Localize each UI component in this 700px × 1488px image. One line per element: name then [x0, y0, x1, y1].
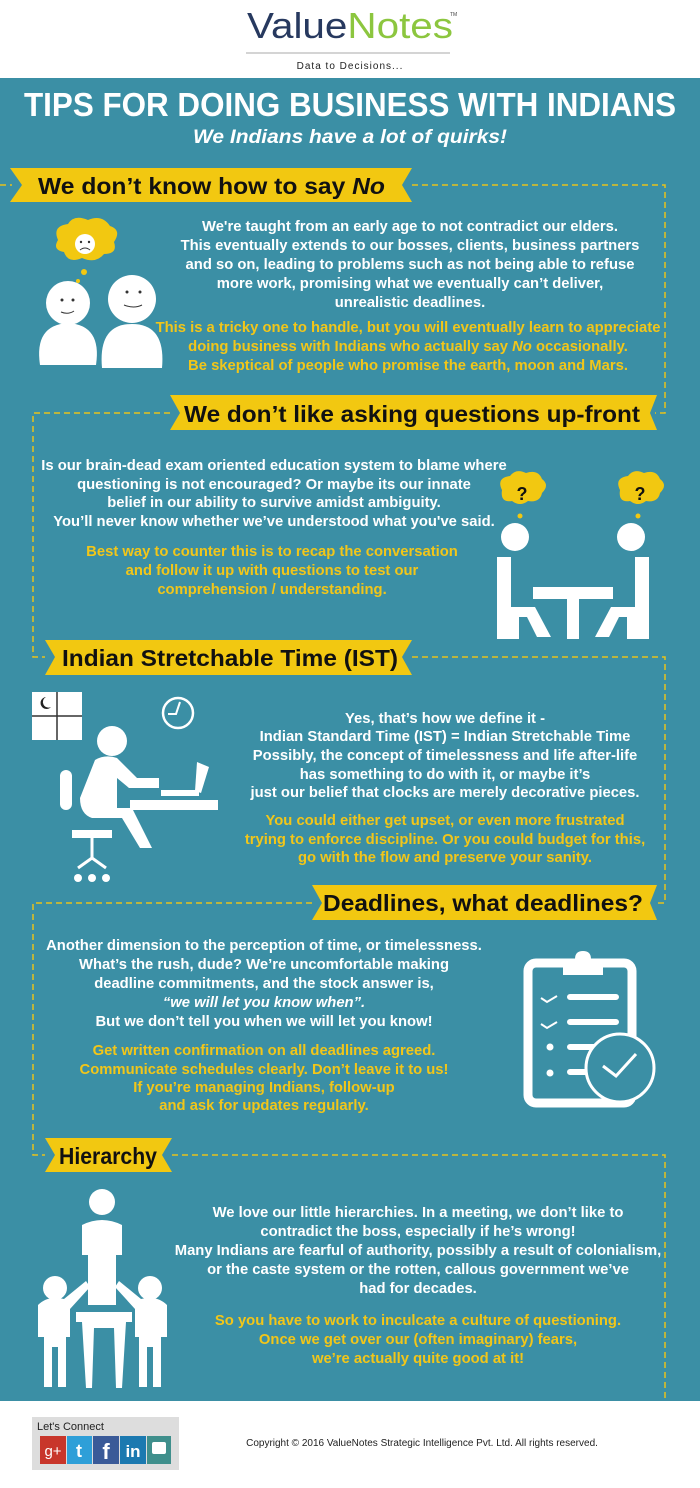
banner 1: We don’t know how to say No: [38, 173, 385, 199]
section 4 text: But we don’t tell you when we will let you know!: [95, 1014, 433, 1030]
banner 5: [45, 1138, 172, 1172]
banner 3: [45, 640, 412, 675]
section 3 text: has something to do with it, or maybe it’s: [300, 767, 590, 783]
section 5 text: had for decades.: [359, 1281, 477, 1297]
section 4 text: and ask for updates regularly.: [159, 1098, 369, 1114]
header logo: Data to Decisions...: [297, 61, 403, 72]
section 2 text: Best way to counter this is to recap the conversation: [86, 544, 458, 560]
section 2 text: belief in our ability to survive amidst ambiguity.: [107, 495, 441, 511]
copyright: Copyright © 2016 ValueNotes Strategic Intelligence Pvt. Ltd. All rights reserved.: [246, 1438, 598, 1449]
section 5 text: or the caste system or the rotten, callous government we’ve: [207, 1262, 629, 1278]
banner 4: Deadlines, what deadlines?: [323, 890, 643, 916]
section 2 text: [41, 458, 507, 598]
section 3 text: [245, 711, 645, 866]
section 5 text: We love our little hierarchies. In a meeting, we don’t like to: [213, 1205, 623, 1221]
banner 3: Indian Stretchable Time (IST): [62, 645, 398, 671]
section 4 text: Get written confirmation on all deadlines agreed.: [93, 1043, 435, 1059]
footer: social connect box: Let's Connect: [37, 1421, 104, 1433]
section 3 text: You could either get upset, or even more frustrated: [265, 813, 625, 829]
section 2 text: comprehension / understanding.: [157, 582, 387, 598]
section 3 text: just our belief that clocks are merely decorative pieces.: [250, 785, 640, 801]
section 3 text: Indian Standard Time (IST) = Indian Stretchable Time: [260, 729, 630, 745]
banner 2: [170, 395, 657, 430]
footer: social connect box: t: [76, 1441, 82, 1461]
icon: person at laptop with window and clock: [32, 692, 218, 882]
header logo: TM: [450, 12, 457, 18]
section 1 text: This eventually extends to our bosses, clients, business partners: [181, 238, 639, 254]
section 1 text: more work, promising what we eventually can’t deliver,: [217, 276, 603, 292]
section 5 text: [175, 1205, 661, 1367]
section 5 text: Many Indians are fearful of authority, possibly a result of colonialism,: [175, 1243, 661, 1259]
footer: social connect box: [32, 1417, 179, 1470]
section 3 text: Possibly, the concept of timelessness and life after-life: [253, 748, 637, 764]
icon: two people at table with question bubbles: ?: [634, 484, 646, 504]
section 1 text: This is a tricky one to handle, but you will eventually learn to appreciate: [156, 320, 660, 336]
section 4 text: “we will let you know when”.: [163, 995, 365, 1011]
section 2 text: questioning is not encouraged? Or maybe its our innate: [77, 477, 471, 493]
section 3 text: Yes, that’s how we define it -: [345, 711, 545, 727]
section 5 text: Once we get over our (often imaginary) fears,: [259, 1332, 577, 1348]
section 4 text: [46, 938, 482, 1114]
section 2 text: Is our brain-dead exam oriented education system to blame where: [41, 458, 507, 474]
icon: clipboard with clock: [528, 951, 654, 1103]
header logo: [246, 5, 457, 72]
title: We Indians have a lot of quirks!: [193, 127, 507, 148]
section 2 text: You’ll never know whether we’ve understood what you've said.: [53, 514, 495, 530]
banner 5: Hierarchy: [59, 1143, 157, 1169]
banner 2: We don’t like asking questions up-front: [184, 401, 640, 427]
section 1 text: Be skeptical of people who promise the earth, moon and Mars.: [188, 358, 628, 374]
dashed frames: [0, 185, 665, 1398]
banner 1: [10, 168, 412, 202]
section 5 text: we’re actually quite good at it!: [311, 1351, 524, 1367]
section 4 text: deadline commitments, and the stock answer is,: [94, 976, 434, 992]
header logo: Value Notes: [247, 5, 453, 46]
banner 4: [312, 885, 657, 920]
footer: social connect box: f: [102, 1439, 110, 1464]
footer: social connect box: g+: [44, 1443, 62, 1460]
section 2 text: and follow it up with questions to test our: [126, 563, 419, 579]
section 4 text: Another dimension to the perception of time, or timelessness.: [46, 938, 482, 954]
title: [24, 86, 676, 148]
title: TIPS FOR DOING BUSINESS WITH INDIANS: [24, 86, 676, 123]
section 5 text: So you have to work to inculcate a culture of questioning.: [215, 1313, 621, 1329]
icon: two people at table with question bubbles: [497, 471, 664, 639]
section 4 text: If you’re managing Indians, follow-up: [133, 1080, 395, 1096]
section 1 text: doing business with Indians who actually say No occasionally.: [188, 339, 628, 355]
section 4 text: What’s the rush, dude? We’re uncomfortable making: [79, 957, 449, 973]
section 4 text: Communicate schedules clearly. Don’t leave it to us!: [80, 1062, 448, 1078]
section 3 text: go with the flow and preserve your sanity.: [298, 850, 592, 866]
section 1 text: unrealistic deadlines.: [335, 295, 485, 311]
icon: two smiley people: [39, 218, 162, 368]
section 1 text: and so on, leading to problems such as not being able to refuse: [186, 257, 634, 273]
section 5 text: contradict the boss, especially if he’s wrong!: [260, 1224, 576, 1240]
footer: social connect box: in: [125, 1442, 141, 1461]
section 1 text: We're taught from an early age to not contradict our elders.: [202, 219, 618, 235]
icon: hierarchy people: [38, 1189, 167, 1388]
icon: two people at table with question bubbles: ?: [516, 484, 528, 504]
section 1 text: [156, 219, 660, 374]
section 3 text: trying to enforce discipline. Or you could budget for this,: [245, 832, 645, 848]
